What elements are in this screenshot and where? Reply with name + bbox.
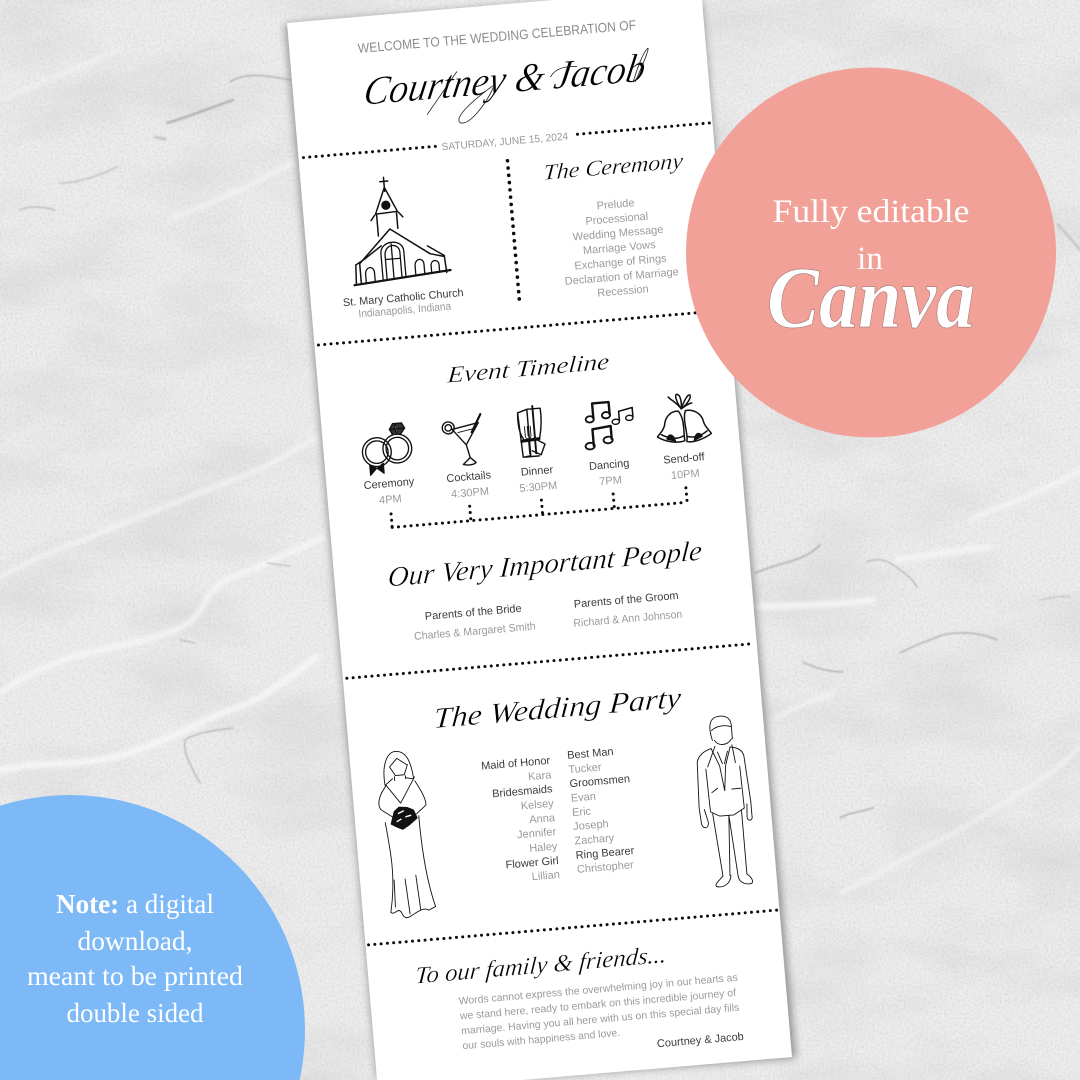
- wedding party list: groom side: Zachary: [574, 832, 615, 848]
- parents of the groom: Parents of the Groom: [573, 590, 679, 611]
- panel: thank-you note: [412, 935, 744, 1070]
- label: dancing: 7PM: [599, 474, 622, 488]
- icon: cocktail: [441, 414, 485, 467]
- divider line: [318, 310, 726, 345]
- wedding party list: groom side: Tucker: [568, 761, 602, 776]
- label: dinner: 5:30PM: [519, 480, 558, 495]
- venue location: Indianapolis, Indiana: [358, 301, 452, 320]
- label: ceremony: Ceremony: [363, 476, 415, 492]
- parents of the groom: [571, 590, 683, 630]
- label: dancing: [589, 458, 631, 489]
- wedding party list: groom side: Evan: [570, 791, 596, 805]
- message paragraph: [457, 972, 742, 1052]
- wedding party list: bride side: Jennifer: [517, 826, 557, 841]
- icon: bells: [654, 392, 712, 445]
- panel: venue: [333, 171, 465, 322]
- timeline connector: [391, 488, 687, 527]
- label: ceremony: [363, 476, 417, 508]
- ceremony order list: Exchange of Rings: [574, 253, 668, 272]
- wedding party list: bride side: Maid of Honor: [481, 755, 551, 773]
- wedding party list: bride side: Anna: [529, 812, 556, 826]
- date row: [303, 118, 711, 165]
- callout: digital download note: Note: a digital: [56, 889, 214, 919]
- message paragraph: Words cannot express the overwhelming joy in our hearts as: [458, 972, 738, 1007]
- ceremony order list: Marriage Vows: [583, 239, 657, 257]
- heading: very important people: Our Very Important People: [387, 536, 703, 594]
- panel: event timeline: [354, 341, 717, 530]
- callout: digital download note: download,: [78, 926, 192, 956]
- heading: couple names: Courtney & Jacob: [361, 45, 649, 114]
- wedding party list: groom side: Joseph: [573, 818, 609, 833]
- parents of the bride: [412, 602, 536, 643]
- ceremony order list: Processional: [585, 211, 649, 228]
- wedding party list: bride side: Bridesmaids: [492, 783, 554, 800]
- heading: the wedding party: The Wedding Party: [433, 682, 682, 735]
- divider line: [347, 644, 754, 678]
- divider line: [369, 910, 777, 945]
- date row: SATURDAY, JUNE 15, 2024: [441, 131, 569, 153]
- callout: digital download note: double sided: [66, 998, 204, 1028]
- heading: to our family and friends: To our family & friends...: [414, 941, 667, 990]
- ceremony order list: Declaration of Marriage: [564, 266, 679, 288]
- wedding party list: bride side: [481, 755, 561, 887]
- callout: fully editable in Canva: Fully editable: [772, 194, 970, 230]
- vertical divider: [507, 161, 520, 306]
- callout: digital download note: [0, 795, 305, 1080]
- heading: the ceremony: The Ceremony: [543, 148, 684, 185]
- label: send-off: [663, 451, 707, 483]
- message paragraph: our souls with happiness and love.: [462, 1027, 620, 1052]
- parents of the bride: Charles & Margaret Smith: [414, 621, 536, 643]
- panel: wedding party: [371, 677, 758, 919]
- illustration: groom: [692, 714, 758, 888]
- callout: fully editable in Canva: Canva: [767, 250, 975, 347]
- icon: napkin with cutlery: [517, 405, 546, 457]
- wedding party list: bride side: Kelsey: [520, 798, 555, 812]
- icon: rings: [360, 422, 414, 476]
- venue name: St. Mary Catholic Church: [342, 287, 464, 309]
- header text: welcome: WELCOME TO THE WEDDING CELEBRATION OF: [357, 17, 637, 56]
- label: send-off: Send-off: [663, 451, 706, 467]
- signature: Courtney & Jacob: [657, 1031, 744, 1050]
- parents of the groom: Richard & Ann Johnson: [573, 609, 683, 630]
- label: send-off: 10PM: [670, 468, 700, 482]
- paper: wedding program: [287, 0, 792, 1080]
- wedding party list: bride side: Haley: [529, 840, 558, 855]
- wedding party list: bride side: Kara: [528, 769, 553, 783]
- icon: music notes: [582, 400, 635, 450]
- callout: fully editable in Canva: in: [857, 241, 883, 277]
- wedding party list: groom side: Christopher: [576, 859, 634, 876]
- paper shadow: [285, 2, 796, 1078]
- wedding party list: groom side: Eric: [572, 806, 592, 819]
- ceremony order list: Prelude: [596, 197, 635, 212]
- wedding party list: bride side: Lillian: [531, 869, 560, 883]
- ceremony order list: Wedding Message: [572, 224, 664, 243]
- label: dinner: [518, 464, 558, 495]
- message paragraph: marriage. Having you all here with us on this special day fills: [461, 1002, 740, 1037]
- panel: ceremony: [541, 148, 696, 303]
- label: dancing: Dancing: [589, 458, 630, 473]
- wedding party list: groom side: Groomsmen: [569, 773, 630, 790]
- ceremony order list: [558, 194, 680, 302]
- label: ceremony: 4PM: [379, 493, 402, 507]
- message paragraph: we stand here, ready to embark on this incredible journey of: [458, 987, 737, 1022]
- illustration: bride: [375, 749, 436, 919]
- label: cocktails: [446, 469, 493, 501]
- label: cocktails: 4:30PM: [451, 486, 489, 501]
- heading: event timeline: Event Timeline: [446, 349, 610, 389]
- ceremony order list: Recession: [597, 283, 649, 300]
- label: dinner: Dinner: [520, 464, 554, 479]
- wedding party list: groom side: Best Man: [567, 746, 614, 762]
- parents of the bride: Parents of the Bride: [424, 603, 522, 623]
- icon: church: [346, 172, 451, 285]
- label: cocktails: Cocktails: [446, 469, 492, 485]
- wedding party list: bride side: Flower Girl: [505, 855, 559, 871]
- wedding party list: groom side: Ring Bearer: [575, 845, 635, 862]
- panel: very important people: [384, 536, 710, 645]
- callout: digital download note: meant to be printed: [27, 961, 244, 991]
- callout: fully editable in Canva: [686, 68, 1056, 438]
- wedding party list: groom side: [567, 745, 638, 876]
